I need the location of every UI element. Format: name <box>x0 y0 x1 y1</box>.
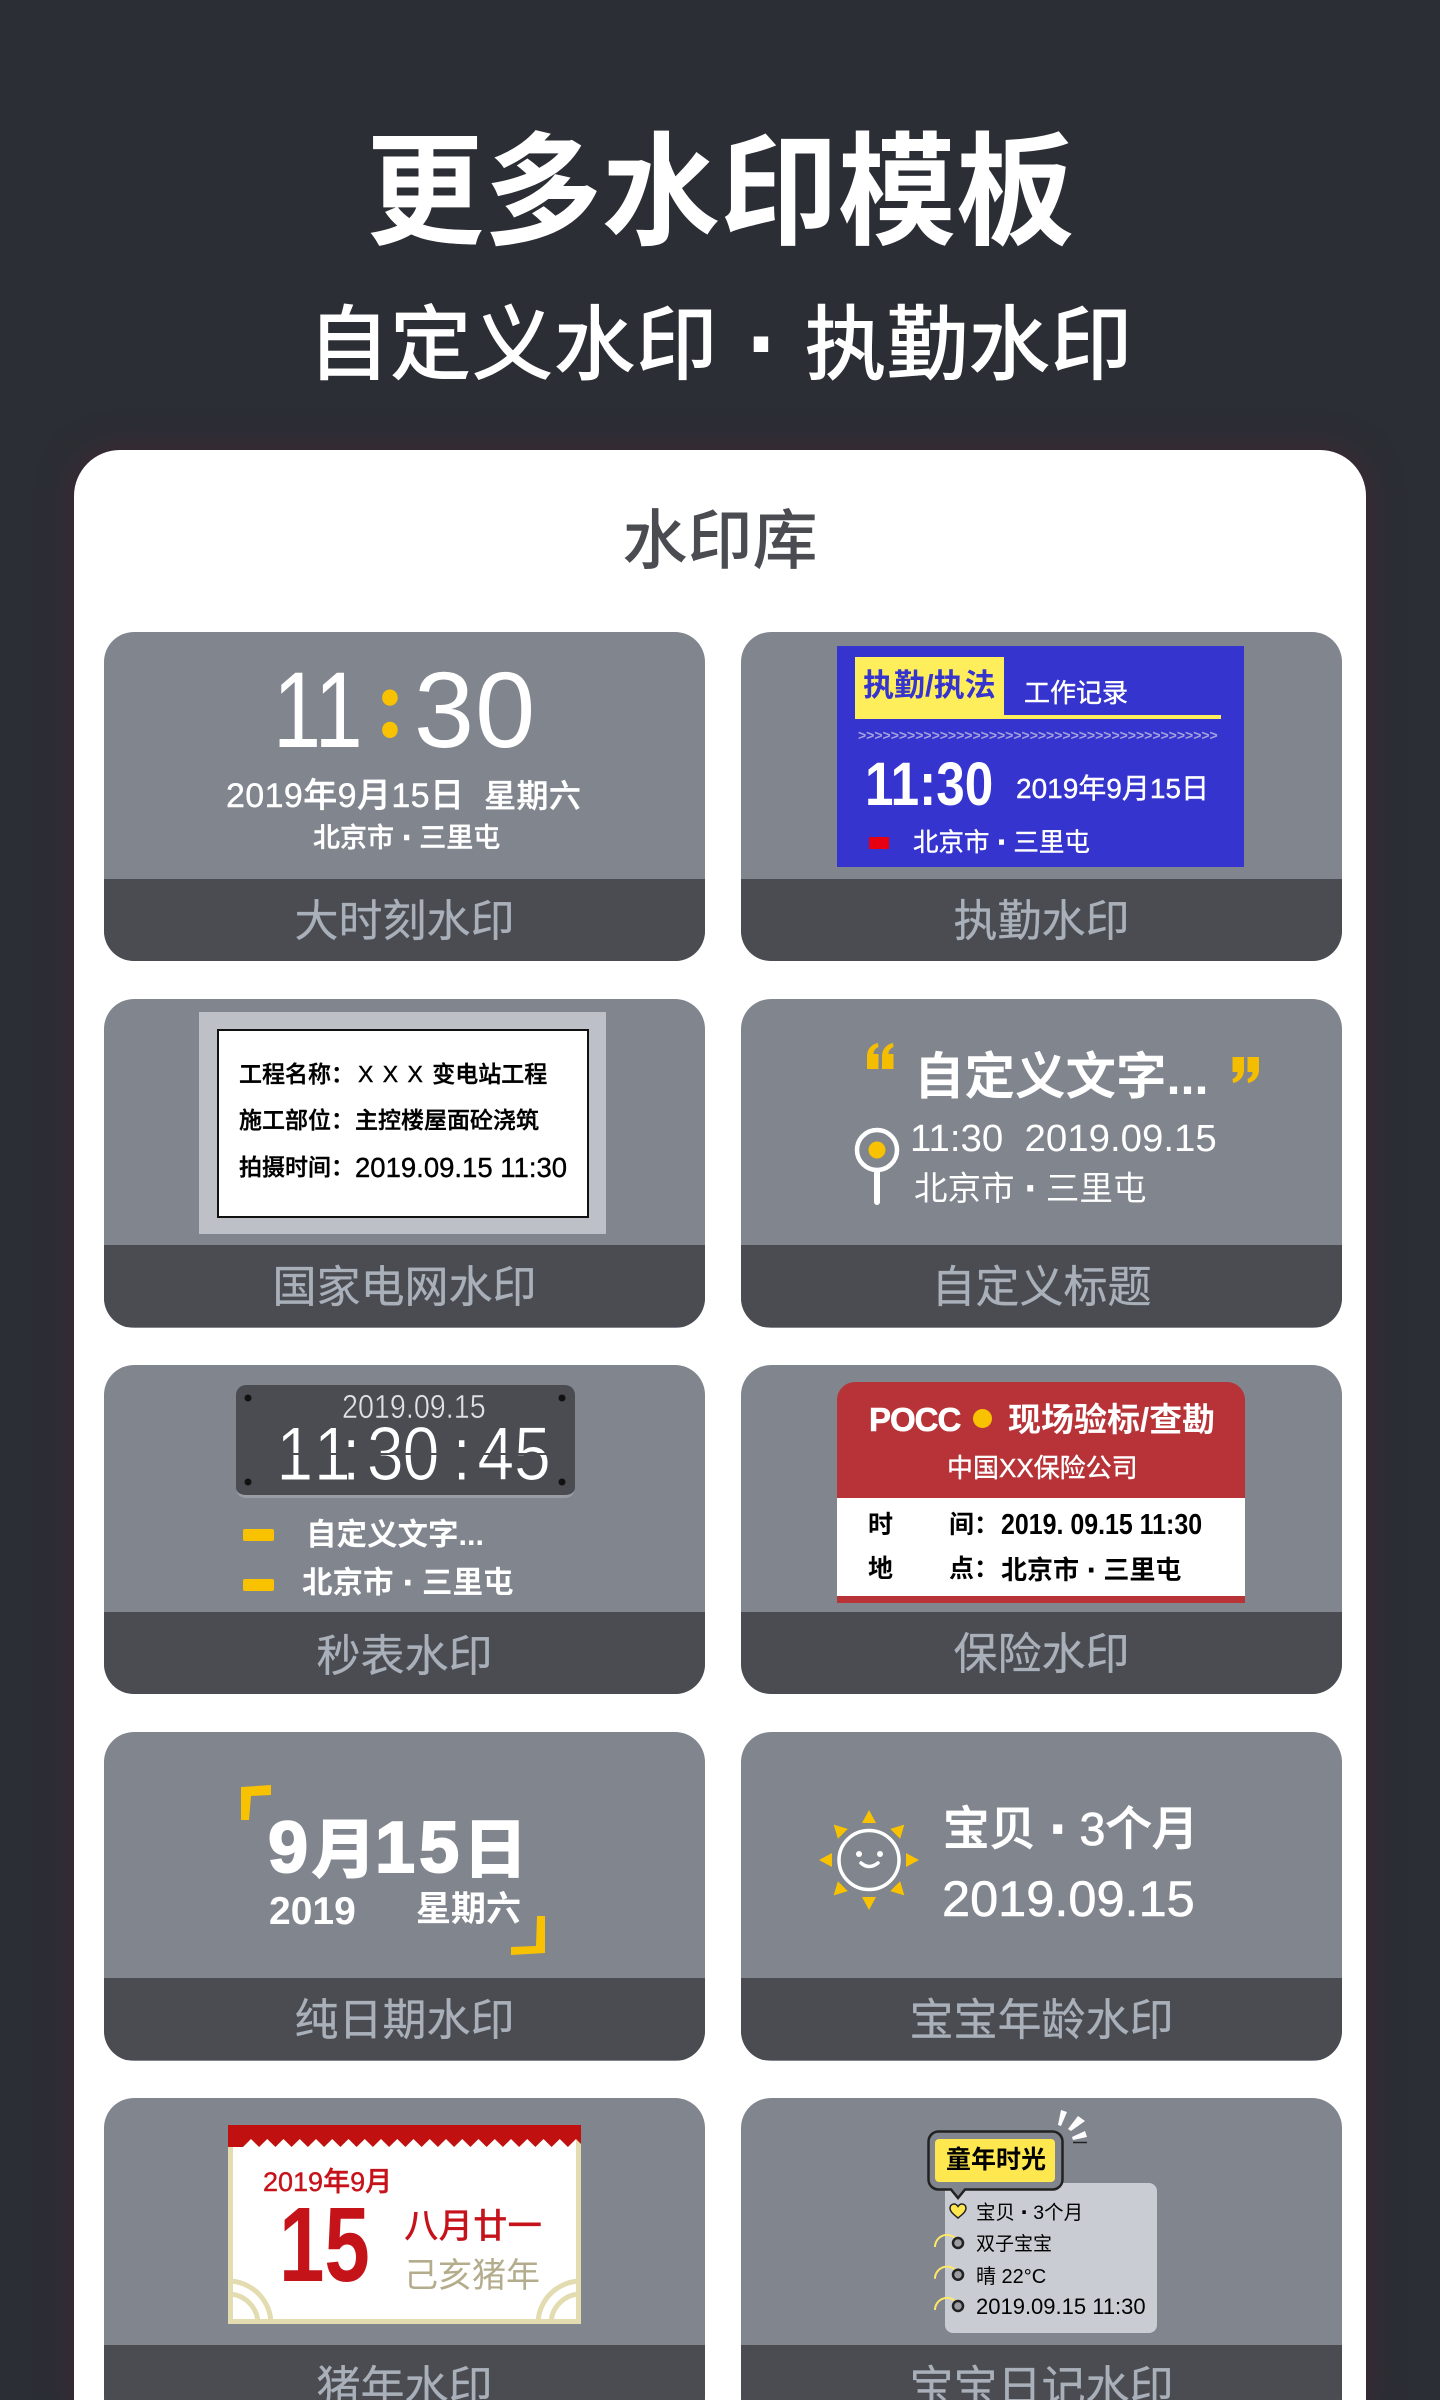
LCD time: 1 <box>314 1412 351 1497</box>
caption band <box>741 1612 1342 1694</box>
LCD time: : <box>453 1412 471 1497</box>
heading: watermark library: 水印库 <box>622 504 818 577</box>
company name: 中国XX保险公司 <box>947 1453 1138 1483</box>
red marker <box>869 837 889 849</box>
card: state grid watermark <box>104 999 705 1328</box>
card: insurance watermark <box>741 1365 1342 1694</box>
year and month: 2019年9月 <box>263 2167 392 2197</box>
weekday: 星期六 <box>416 1890 521 1929</box>
yellow rule <box>855 715 1221 719</box>
baby age: 宝贝 · 3个月 <box>943 1802 1198 1856</box>
site value: 主控楼屋面砼浇筑 <box>355 1107 539 1133</box>
caption band: 自定义标题 <box>932 1263 1152 1312</box>
place value: 北京市 · 三里屯 <box>1001 1555 1181 1586</box>
caption band <box>104 879 705 961</box>
panel: watermark library <box>74 450 1366 2400</box>
card: stopwatch watermark <box>104 1365 705 1694</box>
caption band: 秒表水印 <box>316 1632 492 1681</box>
caption band: 大时刻水印 <box>294 897 514 946</box>
icon: bottom-right bracket <box>511 1916 545 1955</box>
subtitle: 自定义水印 · 执勤水印 <box>308 298 1132 393</box>
card: baby age watermark <box>741 1732 1342 2061</box>
time colon: : <box>376 639 404 762</box>
lunar date: 八月廿一 <box>404 2208 542 2246</box>
custom text: 自定义文字... <box>306 1518 484 1552</box>
icon: heart <box>949 2203 967 2219</box>
LCD time: 1 <box>276 1412 313 1497</box>
caption band <box>104 1978 705 2060</box>
LCD time <box>276 1412 551 1497</box>
date and time: 2019.09.15 11:30 <box>976 2294 1146 2319</box>
caption band: 宝宝年龄水印 <box>910 1996 1174 2045</box>
big date: 9月15日 <box>268 1808 531 1888</box>
icon: smiling sun <box>819 1810 919 1910</box>
speech bubble and sparks <box>927 2110 1087 2200</box>
POCC brand: POCC <box>869 1401 960 1438</box>
card: baby diary watermark <box>741 2098 1342 2400</box>
caption band <box>741 1978 1342 2060</box>
yellow dash two <box>243 1579 274 1591</box>
white body <box>837 1498 1245 1596</box>
work record text: 工作记录 <box>1024 678 1128 708</box>
location: 北京市 · 三里屯 <box>302 1566 514 1601</box>
time hours: 11 <box>273 649 363 770</box>
weather: 晴 22°C <box>976 2266 1046 2288</box>
caption band: 国家电网水印 <box>272 1263 536 1312</box>
icon: plate screws <box>244 1394 566 1486</box>
card: duty watermark <box>741 632 1342 961</box>
grey frame <box>199 1012 606 1234</box>
calendar page <box>228 2125 581 2324</box>
year: 2019 <box>269 1890 356 1933</box>
card: pig year watermark <box>104 2098 705 2400</box>
icon: top-left bracket <box>241 1785 271 1820</box>
location: 北京市 · 三里屯 <box>913 828 1090 858</box>
white sign <box>217 1029 589 1218</box>
chevron row: >>>>>>>>>>>>>>>>>>>>>>>>>>>>>>>>>>>>>>>>>>>> <box>858 727 1218 743</box>
caption band <box>741 879 1342 961</box>
time label start: 时 <box>868 1511 893 1539</box>
yellow dash one <box>243 1529 274 1541</box>
caption band <box>741 1245 1342 1327</box>
card: big time watermark <box>104 632 705 961</box>
icon: location pin <box>854 1128 900 1205</box>
time: 11:30 <box>865 750 993 818</box>
location line: 北京市 · 三里屯 <box>313 823 500 854</box>
caption band: 保险水印 <box>954 1630 1130 1679</box>
date: 2019年9月15日 <box>1016 773 1209 804</box>
LCD time: : <box>342 1412 360 1497</box>
time label: 拍摄时间： <box>239 1154 354 1180</box>
LCD time: 3 <box>367 1412 404 1497</box>
yellow dot <box>973 1409 992 1428</box>
caption band: 执勤水印 <box>954 897 1130 946</box>
yellow tag <box>855 657 1004 715</box>
red plate <box>837 1382 1245 1603</box>
project name label: 工程名称： <box>239 1061 354 1087</box>
date: 2019.09.15 <box>942 1870 1195 1927</box>
LCD time: 0 <box>403 1412 439 1497</box>
caption band <box>741 2345 1342 2400</box>
location: 北京市 · 三里屯 <box>914 1169 1146 1208</box>
icon: bullets with arcs <box>934 2234 964 2312</box>
LCD plate <box>236 1385 575 1498</box>
project name value: X X X 变电站工程 <box>358 1061 547 1087</box>
icon: opening quote <box>867 1043 894 1069</box>
card: date-only watermark <box>104 1732 705 2061</box>
title text: 自定义文字... <box>914 1048 1209 1105</box>
tag text: 童年时光 <box>946 2146 1046 2174</box>
time and date: 11:30 2019.09.15 <box>910 1117 1217 1160</box>
place label end: 点： <box>949 1555 999 1583</box>
baby age: 宝贝 · 3个月 <box>976 2201 1083 2224</box>
LCD time: 4 <box>477 1412 514 1497</box>
caption band <box>104 1245 705 1327</box>
card: custom title watermark <box>741 999 1342 1328</box>
day number: 15 <box>279 2186 370 2304</box>
title: 更多水印模板 <box>366 125 1074 262</box>
caption band <box>104 2345 705 2400</box>
light info panel <box>945 2183 1157 2333</box>
site label: 施工部位： <box>239 1107 354 1133</box>
survey title: 现场验标/查勘 <box>1008 1401 1215 1438</box>
time minutes: 30 <box>414 649 536 770</box>
tag text: 执勤/执法 <box>863 668 996 703</box>
caption band: 纯日期水印 <box>294 1996 514 2045</box>
date line: 2019年9月15日 星期六 <box>226 777 581 815</box>
LCD time: 5 <box>514 1412 551 1497</box>
LCD date: 2019.09.15 <box>342 1388 486 1425</box>
caption band <box>104 1612 705 1694</box>
zodiac year: 己亥猪年 <box>404 2257 540 2295</box>
time value: 2019.09.15 11:30 <box>355 1152 567 1183</box>
time label end: 间： <box>949 1511 999 1539</box>
twins: 双子宝宝 <box>976 2234 1052 2255</box>
icon: closing quote <box>1232 1057 1259 1083</box>
time value: 2019. 09.15 11:30 <box>1001 1509 1202 1541</box>
place label start: 地 <box>868 1555 893 1583</box>
blue plate <box>837 646 1244 867</box>
